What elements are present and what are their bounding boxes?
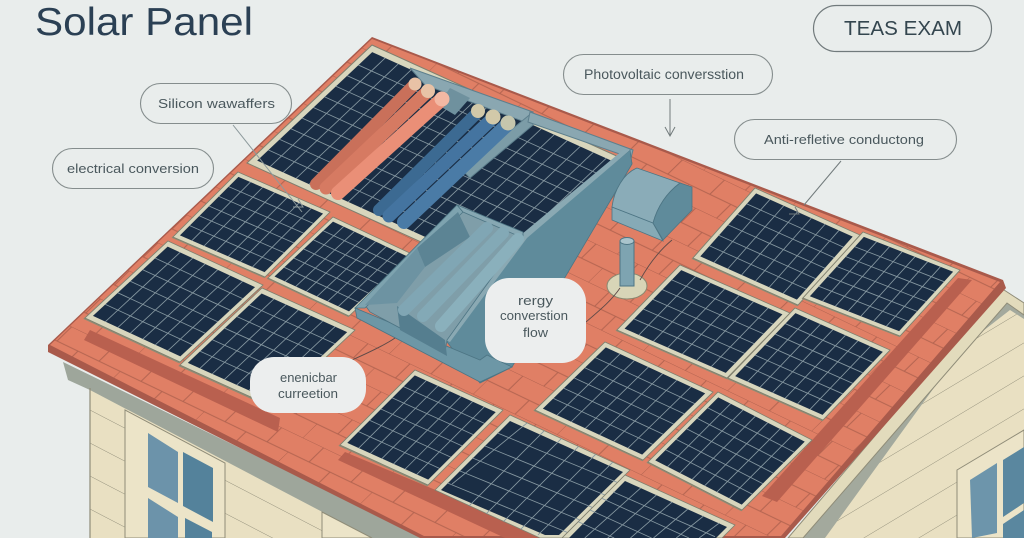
callout: TEAS EXAM: [814, 6, 992, 52]
blue tubes: [379, 104, 516, 222]
conversion box: [355, 150, 632, 383]
arrow: anti-reflective: [789, 161, 841, 214]
panel shadows: [84, 278, 972, 538]
callout: enenicbar curreetion: [250, 357, 366, 413]
junction dome: [612, 168, 692, 241]
callout: energy conversion flow: flow: [523, 325, 549, 340]
vent pipe: [607, 238, 647, 299]
second window frame: left wall: [322, 512, 372, 538]
callout: Photovoltaic conversion: [564, 54, 772, 94]
callout: Silicon wafers: Silicon wawaffers: [158, 96, 276, 111]
solar panel: bottom right cropped: [562, 475, 735, 538]
wires: [352, 240, 672, 360]
callout: anti-reflective: Anti-refletive conductong: [764, 132, 924, 147]
callout: electrical conversion: electrical conversion: [67, 161, 199, 176]
solar panel: left lower: [178, 288, 355, 408]
house wall: left: [63, 362, 425, 538]
callout: Silicon wafers: [140, 84, 292, 124]
callout: enenicbar curreetion: enenicbar: [280, 370, 338, 385]
callout: energy conversion flow: [485, 278, 586, 363]
arrow: photovoltaic: [665, 99, 675, 136]
callout: Photovoltaic conversion: Photovoltaic conversstion: [584, 67, 744, 82]
callout: energy conversion flow: converstion: [500, 308, 568, 323]
tube tray: [410, 68, 633, 178]
solar panel: lower right: [646, 392, 812, 511]
callout: energy conversion flow: rergy: [518, 293, 554, 308]
house wall: gable right: [788, 288, 1024, 538]
window: gable right: [957, 430, 1024, 538]
title: Solar Panel: [35, 1, 253, 44]
solar panel: bottom centre small: [338, 370, 503, 486]
solar panel: middle right: [616, 265, 791, 379]
callout: enenicbar curreetion: curreetion: [278, 386, 338, 401]
solar panel: upper left: [172, 172, 330, 278]
callout: TEAS EXAM: TEAS EXAM: [844, 18, 962, 40]
callout: anti-reflective: [734, 120, 956, 160]
arrow: silicon: [233, 125, 303, 212]
solar panel: middle far right: [727, 308, 890, 421]
solar panel: top right: [692, 188, 861, 306]
solar panel: far left: [83, 241, 263, 363]
solar panel: upper middle: [267, 217, 414, 317]
window: left: [125, 410, 225, 538]
box inner tubes: [404, 228, 518, 326]
callout: electrical conversion: [52, 148, 214, 188]
solar panel: top far right: [802, 232, 960, 337]
orange tubes: [316, 78, 450, 193]
solar panel: large top with tubes: [247, 45, 632, 281]
solar panel: centre right: [533, 342, 714, 461]
solar panel: bottom centre large: [435, 415, 630, 538]
